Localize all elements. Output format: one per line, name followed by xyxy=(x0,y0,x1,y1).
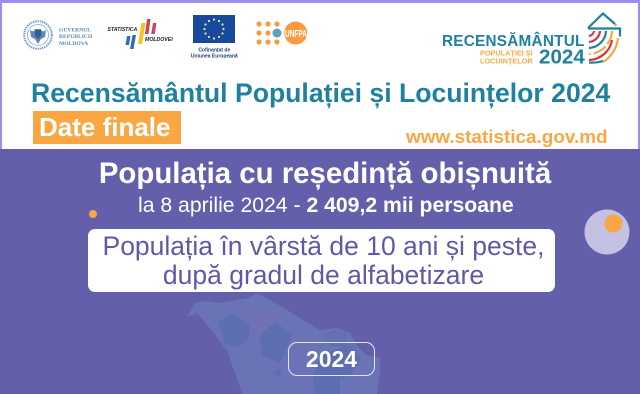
logo: Guvernul Republicii Moldova: MOLDOVA xyxy=(59,41,88,47)
year label xyxy=(288,342,375,376)
website link: www.statistica.gov.md xyxy=(406,127,608,148)
logo: Statistica Moldovei xyxy=(108,19,173,49)
logo: Recensământul 2024: RECENSĂMÂNTUL xyxy=(442,32,585,50)
logo: European Union co-funding: Uniunea Europeană xyxy=(191,54,238,60)
logo: Recensământul 2024 xyxy=(442,12,622,68)
logo: Guvernul Republicii Moldova xyxy=(23,20,92,50)
badge: Date finale: Date finale xyxy=(39,112,170,142)
callout: population aged 10 and over xyxy=(88,229,555,292)
logo: Guvernul Republicii Moldova: GUVERNUL xyxy=(59,28,91,34)
logo: Recensământul 2024: POPULAȚIEI ȘI xyxy=(480,48,533,58)
year label: 2024 xyxy=(306,346,357,372)
callout: population aged 10 and over: după gradul de alfabetizare xyxy=(163,260,484,290)
decorative circles: lilac and orange xyxy=(584,210,630,254)
logo: Recensământul 2024: 2024 xyxy=(539,46,585,68)
logo: Recensământul 2024: LOCUINȚELOR xyxy=(480,56,533,66)
callout: population aged 10 and over: Populația în vârstă de 10 ani și peste, xyxy=(103,231,544,261)
map of Moldova xyxy=(187,293,380,394)
logo: European Union co-funding: Cofinanțat de xyxy=(198,48,230,54)
decorative dot: small orange xyxy=(89,210,97,218)
header panel xyxy=(0,0,640,149)
logo: European Union co-funding xyxy=(191,15,238,60)
logo: Guvernul Republicii Moldova: REPUBLICII xyxy=(59,34,92,40)
title: Recensământul Populației și Locuințelor 2024 xyxy=(31,78,610,108)
logo: Statistica Moldovei: STATISTICA xyxy=(108,27,138,33)
heading: resident population: Populația cu reședință obișnuită xyxy=(99,157,551,190)
logo: Statistica Moldovei: MOLDOVEI xyxy=(145,37,173,43)
subheading: population total: la 8 aprilie 2024 - 2 409,2 mii persoane xyxy=(138,194,514,217)
logo: UNFPA xyxy=(256,21,308,45)
